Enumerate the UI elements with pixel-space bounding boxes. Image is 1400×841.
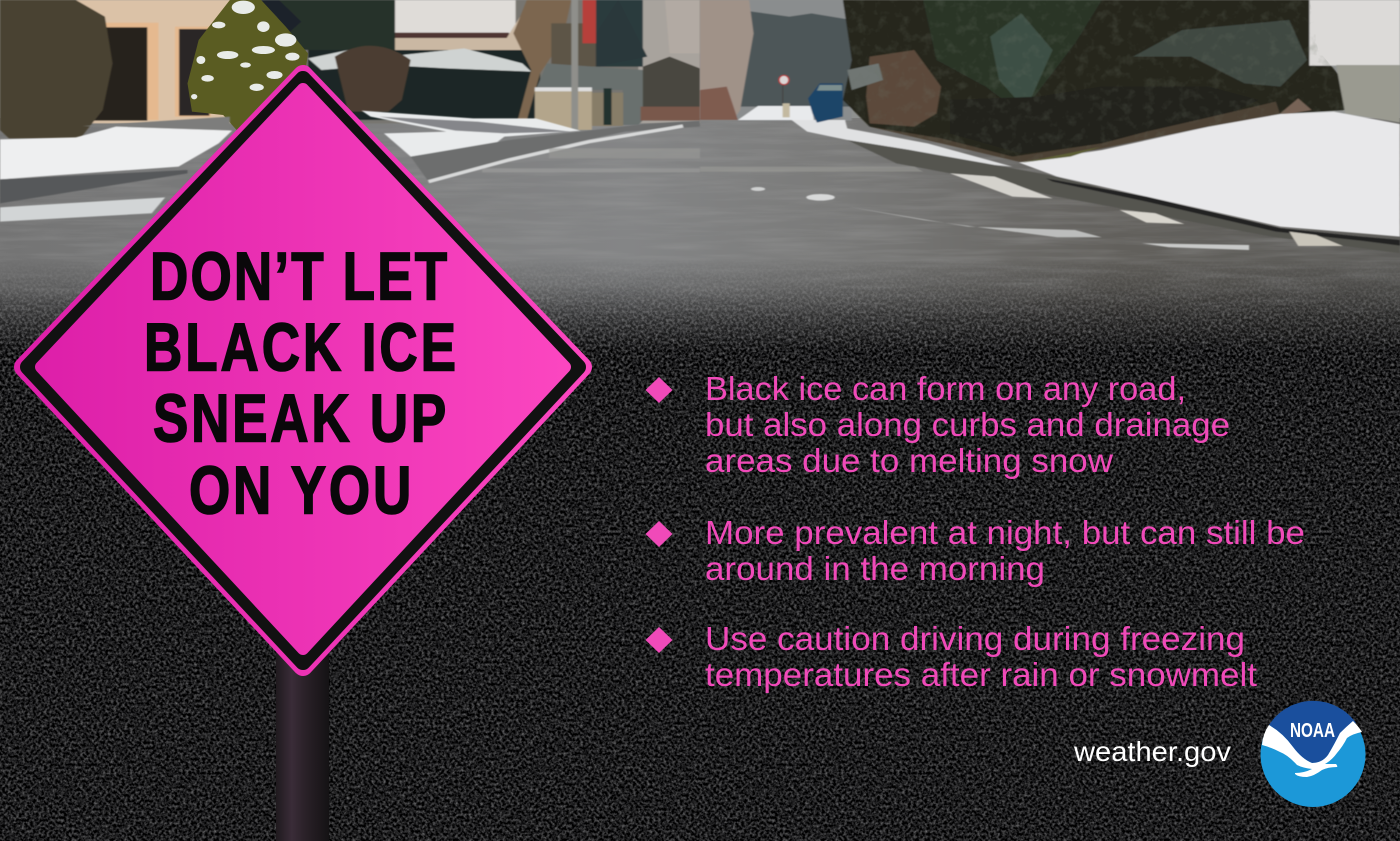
bullet 3: Use caution driving during freezing (705, 620, 1245, 657)
left side of street: houses and garden (0, 0, 700, 138)
sign headline: ON YOU (189, 452, 411, 528)
asphalt foreground with fade into photo (0, 258, 1400, 841)
bullet 3: temperatures after rain or snowmelt (705, 656, 1257, 693)
bullet 2: around in the morning (705, 550, 1045, 587)
NOAA logo (1260, 701, 1366, 807)
bullet list (646, 370, 1305, 693)
bullet 2 (646, 514, 1305, 587)
bullet 1: but also along curbs and drainage (705, 406, 1230, 443)
sign headline (144, 238, 456, 528)
sign post (276, 650, 329, 841)
sign headline: SNEAK UP (153, 380, 446, 456)
right side of street: hedge, wall, snow (700, 0, 1400, 253)
bullet 3 (646, 620, 1257, 693)
snow banks, left (0, 111, 700, 222)
bullet 1 (646, 370, 1230, 479)
sign headline: DON’T LET (150, 238, 447, 314)
sign headline: BLACK ICE (144, 309, 456, 385)
bullet 1: Black ice can form on any road, (705, 370, 1186, 407)
snow-covered conifer (187, 0, 308, 130)
bullet 1: areas due to melting snow (705, 442, 1113, 479)
road surface (0, 118, 1400, 358)
website url: weather.gov (1073, 736, 1231, 767)
photo: winter street (0, 0, 1400, 358)
NOAA wordmark: NOAA (1290, 720, 1335, 742)
warning sign (24, 75, 582, 666)
hedge foliage texture (840, 0, 1350, 165)
bullet 2: More prevalent at night, but can still be (705, 514, 1305, 551)
